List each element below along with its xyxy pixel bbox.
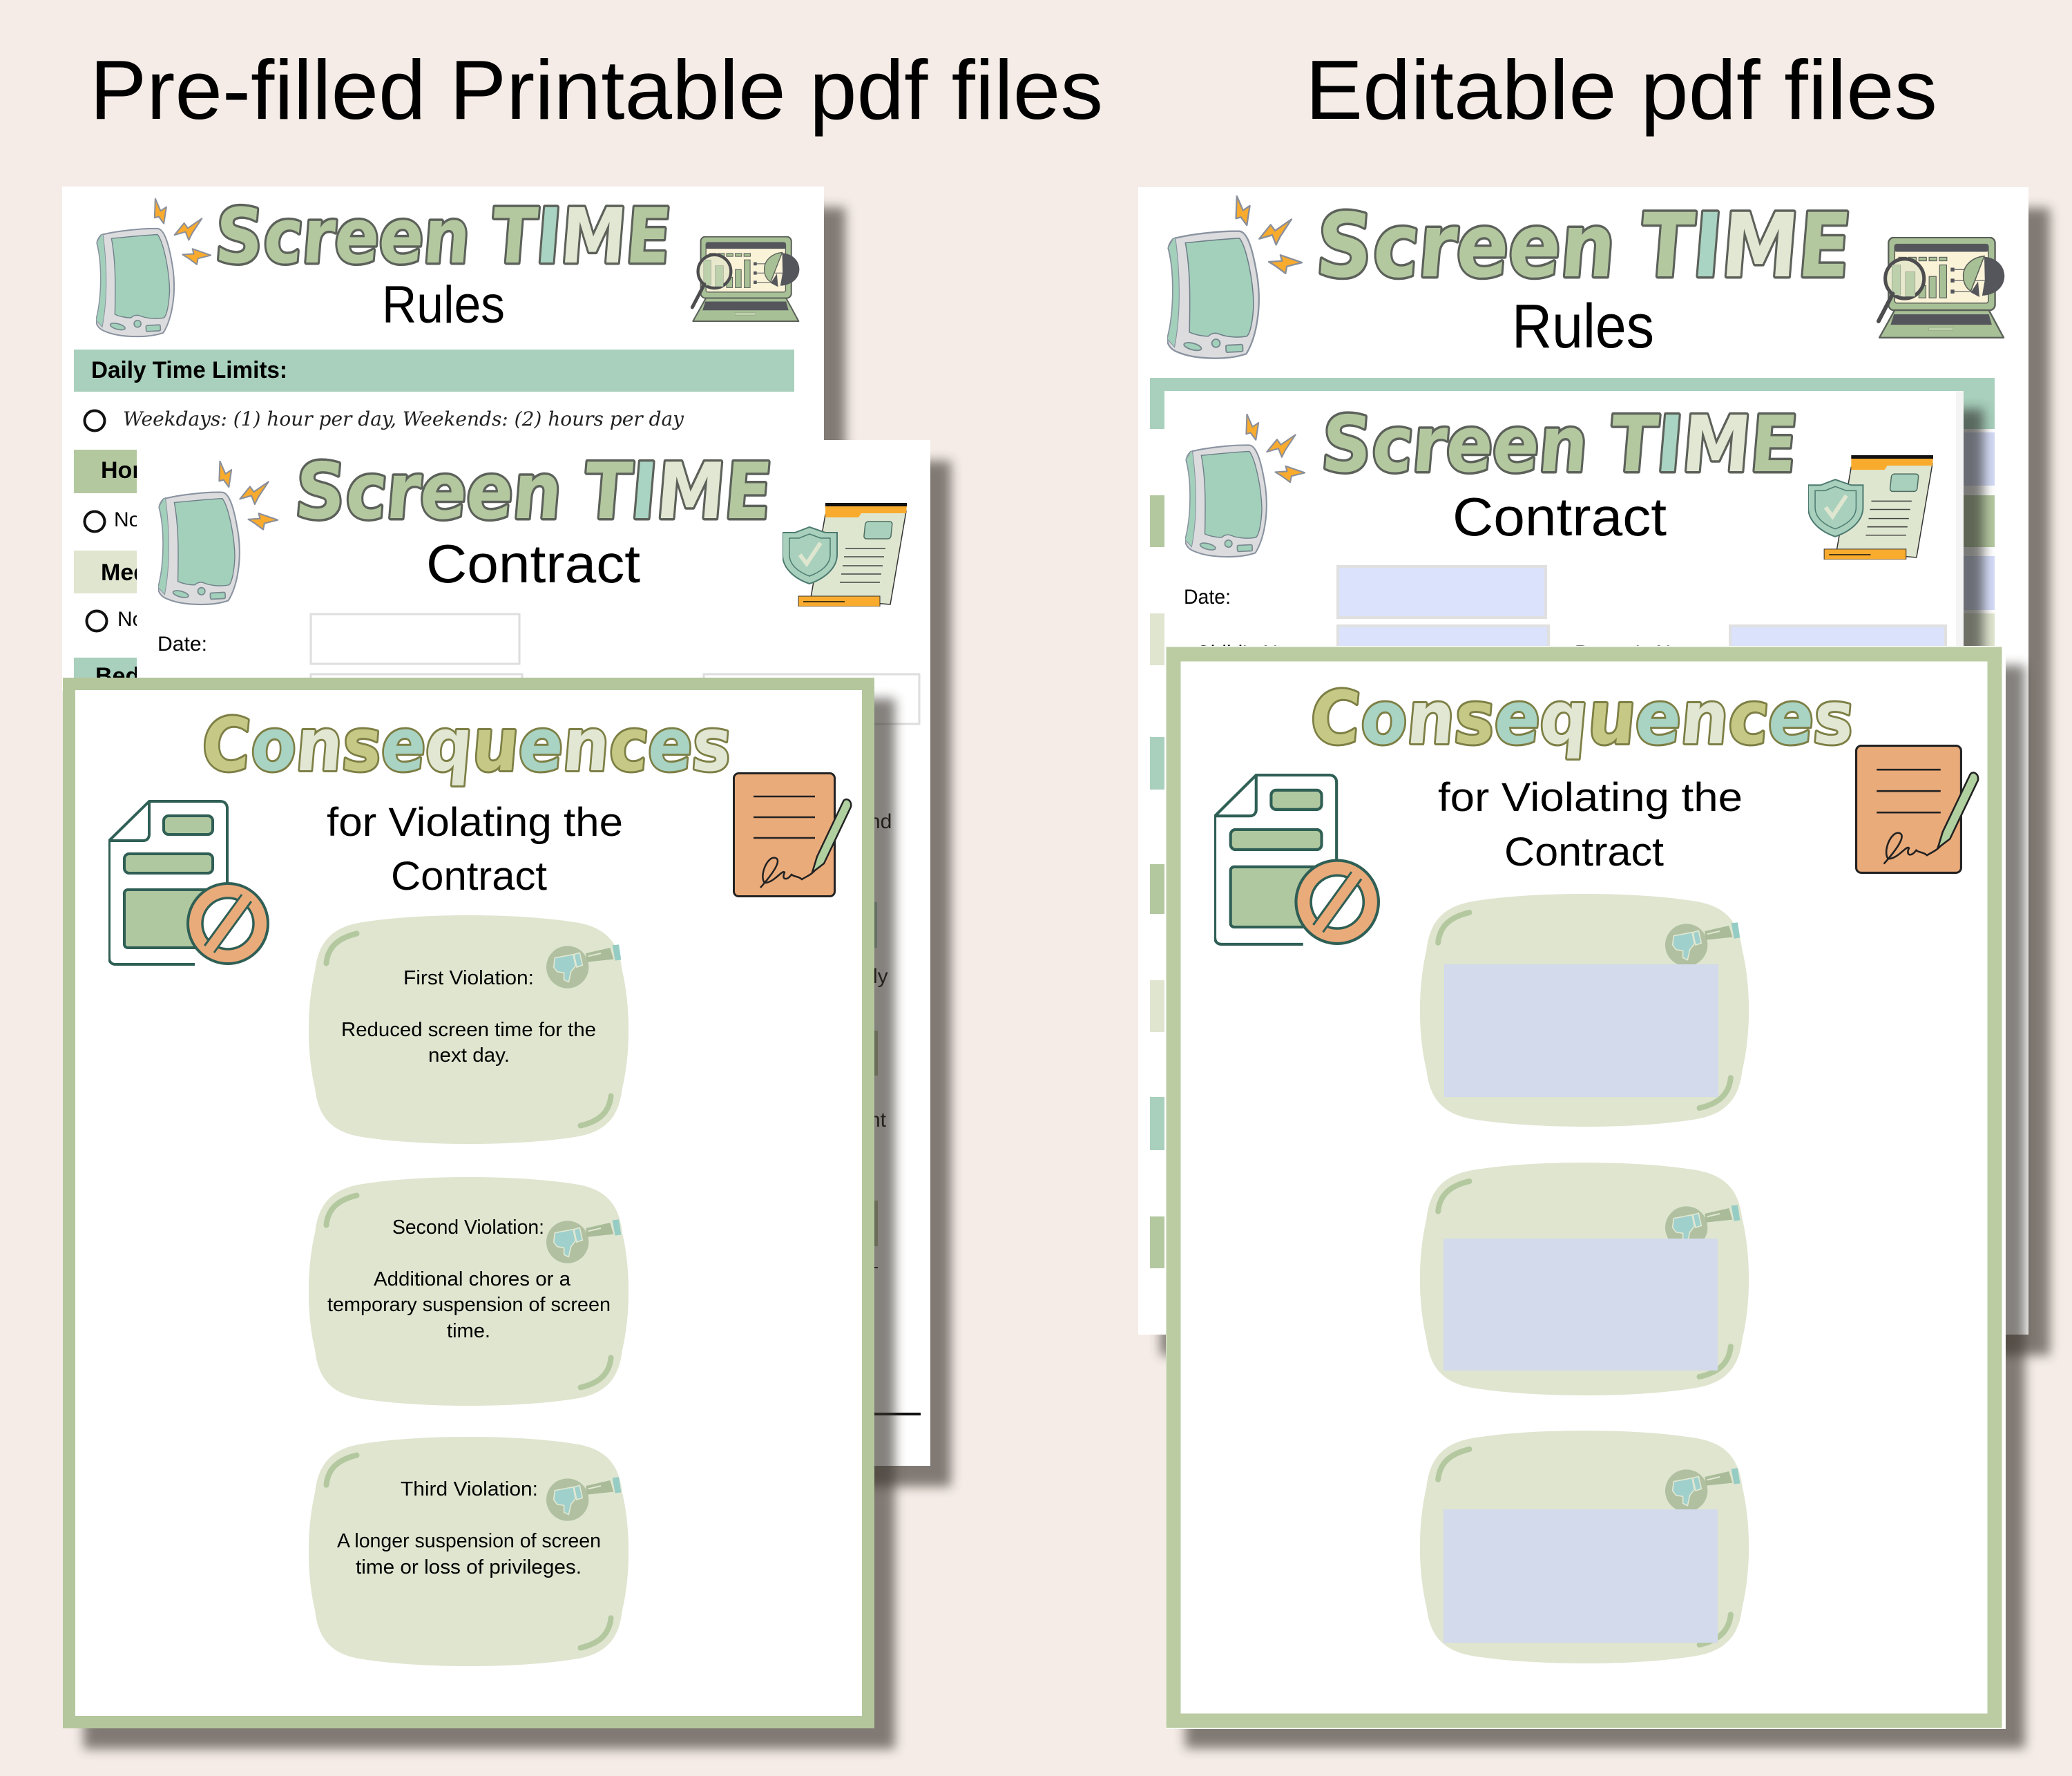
title: screen time rules: Screen TIME xyxy=(1313,195,1856,298)
field: date xyxy=(1338,566,1546,618)
field: parent name xyxy=(1730,626,1946,677)
title: consequences: Consequences xyxy=(199,703,734,788)
subtitle: for violating the contract: Contract xyxy=(391,854,547,899)
banner: daily time limits: Daily Time Limits: xyxy=(91,357,287,383)
title: consequences: Consequences xyxy=(1307,676,1857,761)
field: child name xyxy=(311,674,522,724)
icon: laptop with charts xyxy=(1879,238,2004,338)
panel: pre-filled pages stack xyxy=(62,187,951,1749)
heading: pre-filled printable pdf files: Pre-filled Printable pdf files xyxy=(90,43,1103,137)
title: screen time contract: Screen TIME xyxy=(292,447,776,537)
banner: media: Med xyxy=(101,560,148,586)
card: second violation: temporary suspension of screen xyxy=(327,1294,611,1316)
label: child name: Child's Name: xyxy=(1196,642,1324,665)
option: no second: No xyxy=(117,608,144,631)
banner: bedtime xyxy=(74,658,143,691)
option: weekdays and weekends: Weekdays: (1) hour per day, Weekends: (2) hours per day xyxy=(123,408,684,430)
label: date: Date: xyxy=(157,633,207,656)
title: screen time contract: Screen TIME xyxy=(1318,400,1801,490)
subtitle: rules: Rules xyxy=(382,276,505,334)
card: third violation xyxy=(309,1437,629,1666)
icon: prohibited document xyxy=(109,801,268,964)
card: first violation: next day. xyxy=(428,1044,510,1067)
banner: daily time limits xyxy=(74,350,794,392)
card: first violation xyxy=(309,915,629,1144)
subtitle: for violating the contract: for Violating the xyxy=(327,800,623,845)
contract text fragments at right edge xyxy=(869,810,921,1415)
subtitle: for violating the contract xyxy=(1438,775,1743,875)
field: date xyxy=(311,614,519,664)
banner: homework: Hor xyxy=(101,457,142,484)
banner: bedtime: Bed xyxy=(95,663,140,689)
icon: phone with lightning bolts xyxy=(96,199,211,336)
icon: shield and document xyxy=(1808,455,1933,560)
subtitle: for violating the contract: for Violating the xyxy=(1438,775,1743,820)
icon: phone with lightning bolts xyxy=(158,461,278,604)
page: pre-filled contract xyxy=(137,440,951,1487)
card: third violation: Third Violation: xyxy=(401,1478,538,1500)
page: editable rules xyxy=(1138,187,2050,1355)
page: pre-filled consequences xyxy=(69,684,895,1749)
card: second violation: Second Violation: xyxy=(392,1216,544,1239)
icon: laptop with charts xyxy=(692,237,799,321)
icon: phone with lightning bolts xyxy=(1167,196,1302,359)
card: second violation: Additional chores or a xyxy=(374,1268,571,1290)
subtitle: for violating the contract: Contract xyxy=(1504,830,1664,875)
card: third violation: time or loss of privileges. xyxy=(356,1556,582,1578)
contract text fragments at right edge: ly xyxy=(873,965,888,988)
card: first violation: Reduced screen time for the xyxy=(341,1019,596,1041)
card: second violation input xyxy=(1420,1163,1749,1395)
field: child name xyxy=(1338,626,1548,677)
banner: homework xyxy=(74,450,143,493)
label: parent name: Parent's Name: xyxy=(1575,642,1717,665)
icon: signed contract xyxy=(733,774,851,897)
option: no: No xyxy=(114,508,140,531)
page: editable contract xyxy=(1164,391,1984,1317)
icon: signed contract xyxy=(1857,746,1978,872)
contract text fragments at right edge: nt xyxy=(869,1109,887,1132)
page: pre-filled rules xyxy=(62,187,845,691)
panel: editable pages stack xyxy=(1138,187,2050,1748)
option: no xyxy=(84,508,140,532)
subtitle: for violating the contract xyxy=(327,800,623,899)
form rows behind contract xyxy=(1150,378,1995,1268)
field: parent name xyxy=(704,674,919,724)
subtitle: rules: Rules xyxy=(1512,292,1654,361)
card: third violation input xyxy=(1420,1431,1749,1663)
card: first violation input xyxy=(1420,894,1749,1127)
card: second violation: time. xyxy=(447,1320,490,1342)
subtitle: contract: Contract xyxy=(426,533,640,594)
card: second violation xyxy=(309,1177,629,1406)
option: no second xyxy=(87,608,144,631)
card: third violation: A longer suspension of screen xyxy=(337,1530,601,1552)
label: date: Date: xyxy=(1184,586,1231,609)
icon: phone with lightning bolts xyxy=(1185,414,1305,557)
heading: editable pdf files: Editable pdf files xyxy=(1305,43,1937,137)
icon: shield and document xyxy=(783,503,907,607)
icon: prohibited document xyxy=(1215,775,1379,944)
contract text fragments at right edge: nd xyxy=(869,810,892,833)
card: first violation: First Violation: xyxy=(403,967,534,989)
title: screen time rules: Screen TIME xyxy=(212,192,675,280)
banner: media xyxy=(74,551,148,593)
page: editable consequences xyxy=(1166,646,2025,1748)
subtitle: contract: Contract xyxy=(1452,486,1667,547)
